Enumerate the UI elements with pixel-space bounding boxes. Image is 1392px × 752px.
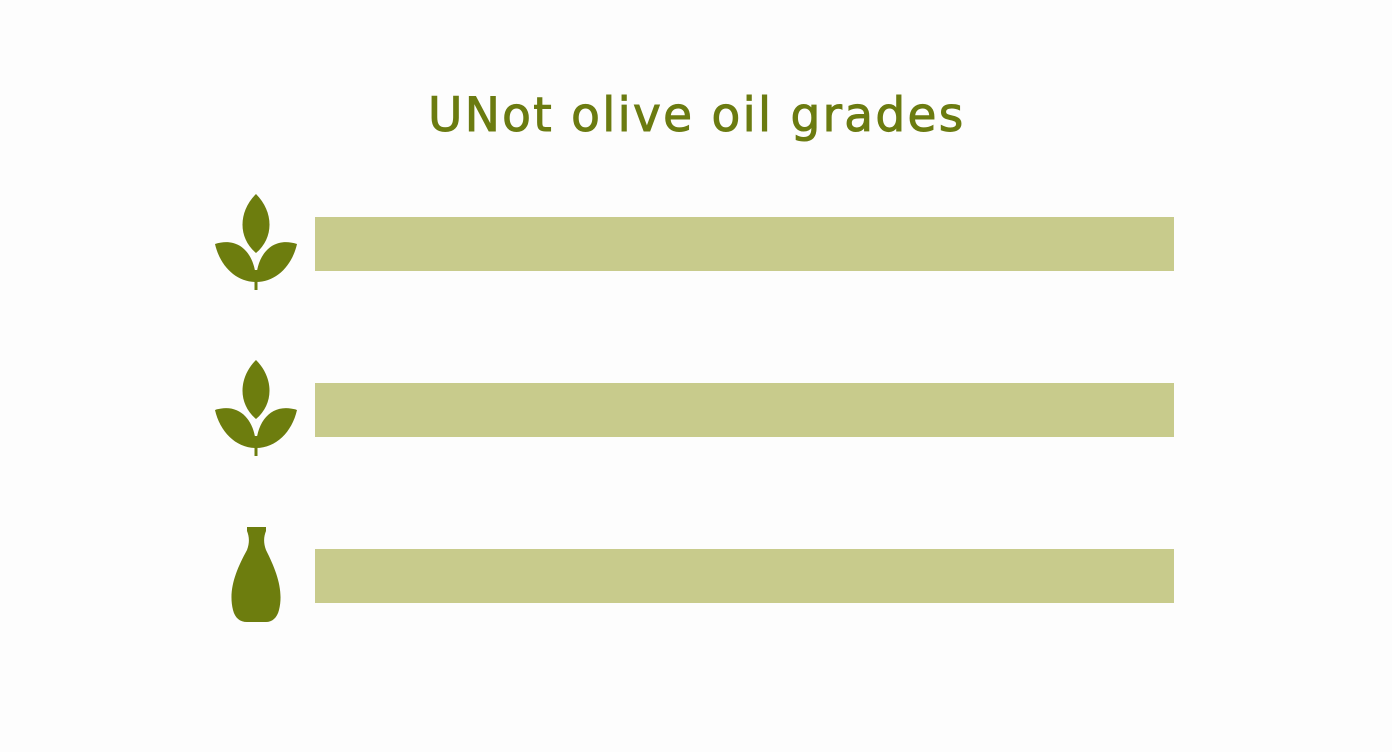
row 2 [215,360,1174,456]
icon: leaf sprout [215,360,297,456]
row 1 [215,194,1174,290]
bar 2 [315,383,1174,437]
bar 3 [315,549,1174,603]
row 3 [231,527,1174,622]
icon: oil bottle [231,527,281,622]
bar 1 [315,217,1174,271]
icon: leaf sprout [215,194,297,290]
title: UNot olive oil grades [428,88,966,143]
